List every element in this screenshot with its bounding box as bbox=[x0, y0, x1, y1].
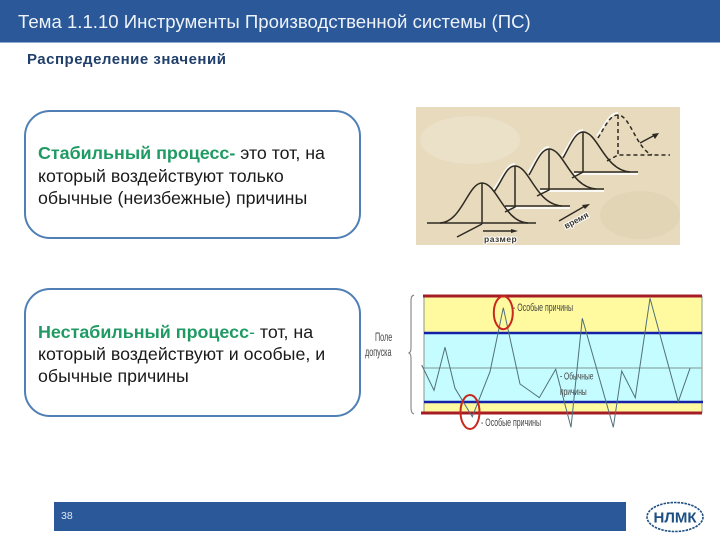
title: Тема 1.1.10 Инструменты Производственной системы (ПС) bbox=[18, 11, 531, 32]
icon: NLMK logo: НЛМК bbox=[653, 510, 697, 526]
circle: special cause bottom bbox=[460, 395, 480, 429]
label: common causes 2: причины bbox=[560, 385, 587, 397]
data line bbox=[422, 298, 690, 427]
text: unstable process definition: обычные причины bbox=[38, 366, 189, 386]
curve 4 bbox=[563, 132, 638, 178]
curve 2 bbox=[494, 166, 570, 212]
chart: control chart with tolerance field bbox=[365, 294, 703, 430]
text: stable process definition: обычные (неизбежные) причины bbox=[38, 188, 307, 208]
arrow: shift bbox=[640, 133, 659, 143]
label: tolerance field 2: допуска bbox=[365, 346, 392, 360]
label: special causes top: - Особые причины bbox=[513, 301, 573, 315]
subtitle: Распределение значений bbox=[27, 51, 226, 68]
dashed future curve bbox=[598, 115, 670, 161]
icon: NLMK logo bbox=[646, 502, 704, 532]
footer bar bbox=[54, 502, 626, 531]
circle: special cause top bbox=[494, 296, 513, 329]
label: special causes bottom: - Особые причины bbox=[481, 416, 541, 430]
header bar bbox=[0, 0, 720, 43]
panel: stable process bbox=[24, 110, 361, 239]
label: common causes: - Обычные bbox=[560, 370, 594, 382]
label: tolerance field: Поле bbox=[375, 331, 393, 345]
text: unstable process definition bbox=[38, 322, 325, 386]
chart: shifting distributions over time bbox=[416, 107, 680, 245]
label: time: время bbox=[562, 210, 590, 231]
page number: 38 bbox=[61, 510, 73, 522]
curve 1 bbox=[427, 183, 536, 237]
blue band bbox=[424, 333, 702, 402]
text: stable process definition: который воздействуют только bbox=[38, 166, 284, 186]
yellow band bbox=[424, 296, 702, 413]
text: unstable process definition: который воздействуют и особые, и bbox=[38, 344, 325, 364]
curve 3 bbox=[529, 149, 604, 196]
text: unstable process definition: Нестабильный процесс- тот, на bbox=[38, 322, 313, 342]
arrow: size bbox=[483, 229, 518, 233]
panel: unstable process bbox=[24, 288, 361, 417]
brace: tolerance bbox=[409, 295, 414, 414]
label: size: размер bbox=[484, 234, 517, 244]
arrow: time bbox=[559, 204, 590, 221]
text: stable process definition bbox=[38, 143, 325, 208]
limit lines bbox=[421, 296, 703, 413]
text: stable process definition: Стабильный процесс- это тот, на bbox=[38, 143, 325, 163]
